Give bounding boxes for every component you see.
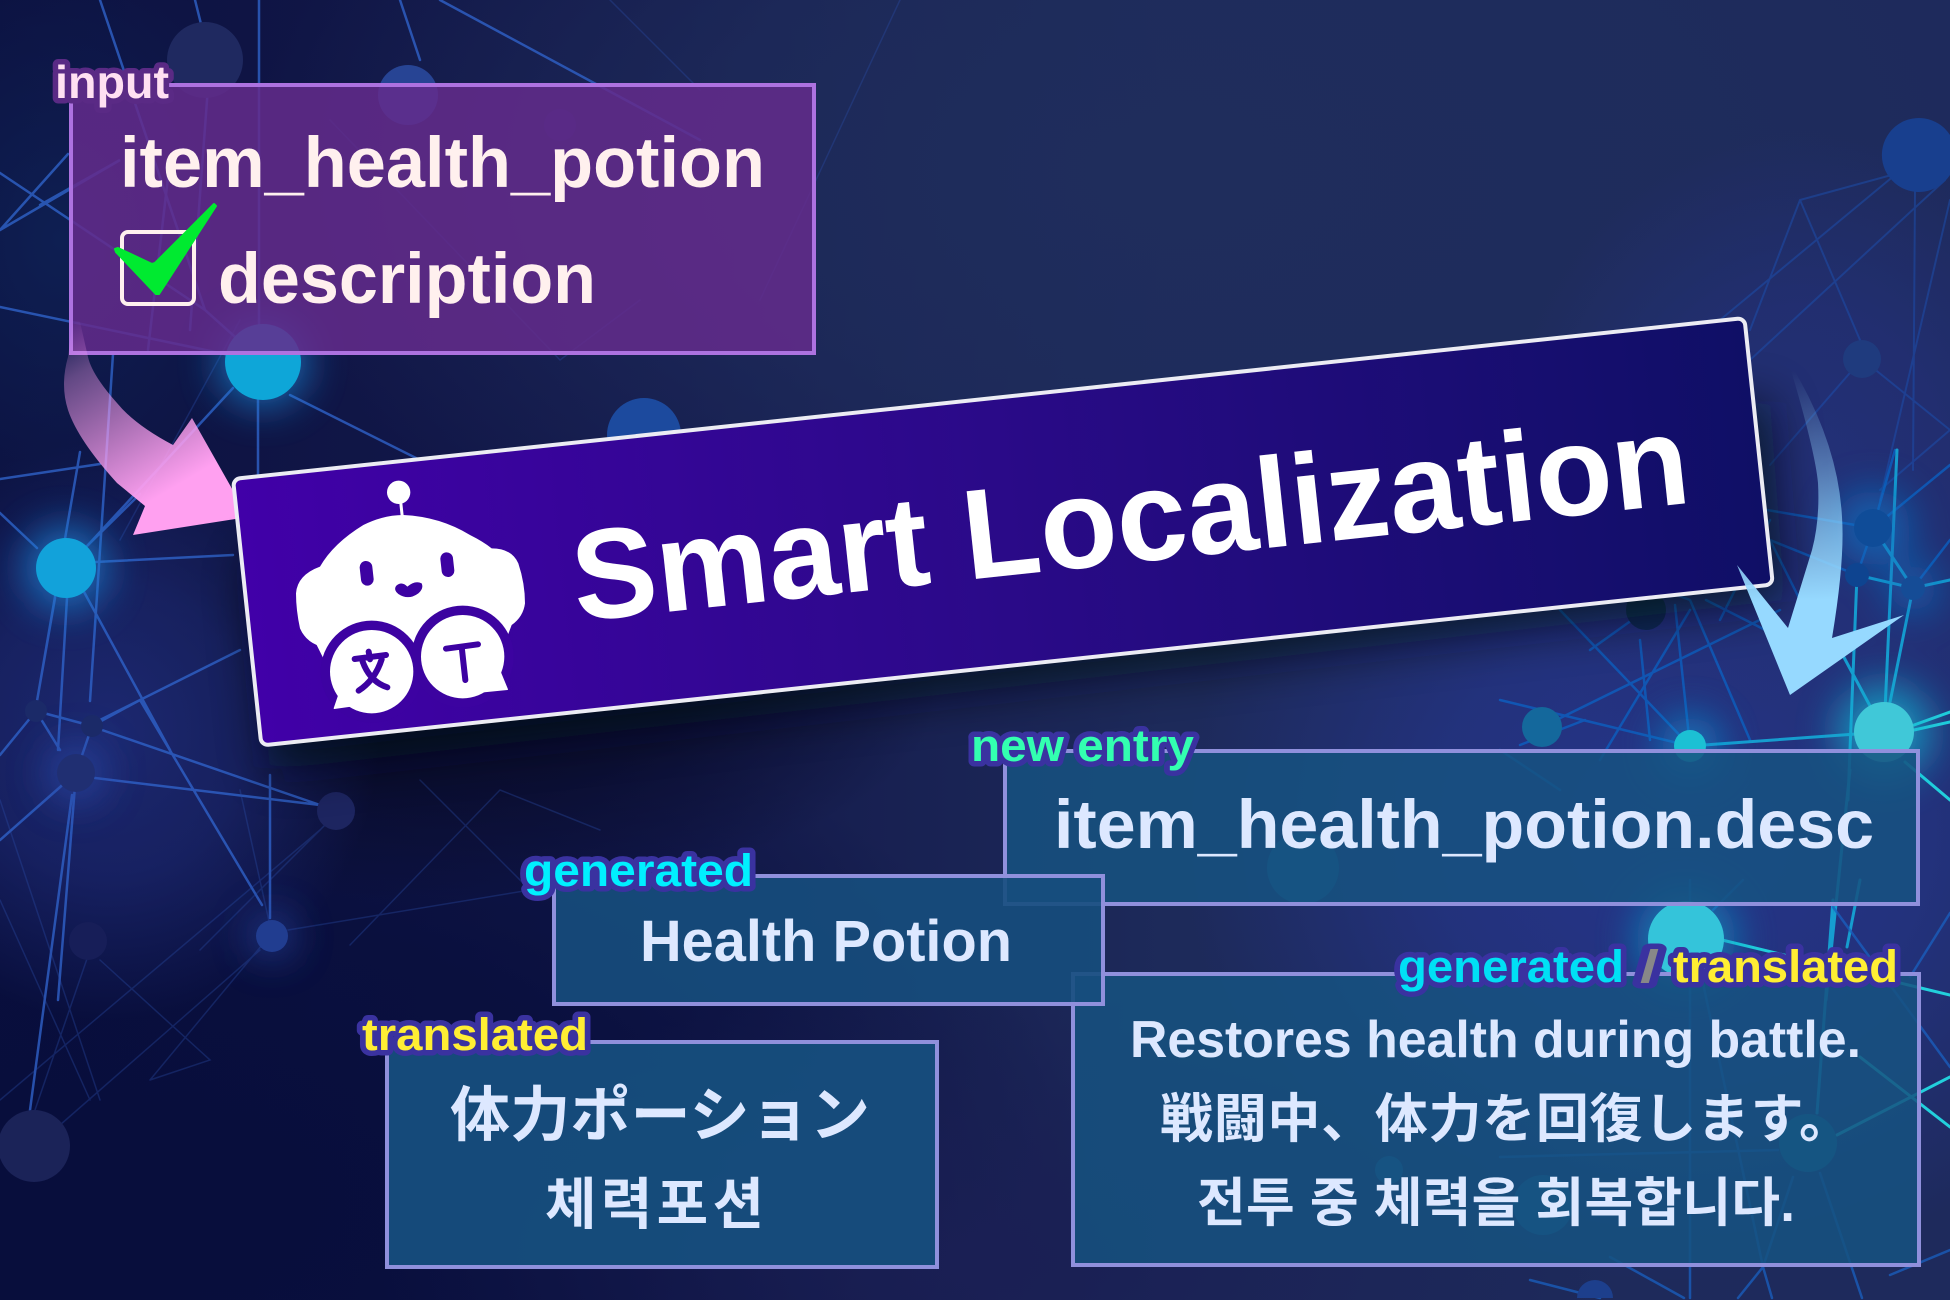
icon: green check mark — [115, 204, 216, 294]
label: translated: translated — [362, 1009, 588, 1060]
japanese description: 戦闘中、体力を回復します。 — [1160, 1090, 1852, 1149]
arrow: pink input arrow — [64, 321, 248, 535]
panel: input — [71, 85, 814, 353]
new entry key text: item_health_potion.desc — [1054, 786, 1874, 863]
icon: robot logo — [296, 481, 525, 723]
translated tag: translated — [1673, 941, 1898, 992]
panel: new entry — [1005, 751, 1918, 904]
banner title: Smart Localization — [565, 388, 1696, 649]
korean description: 전투 중 체력을 회복합니다. — [1197, 1174, 1795, 1233]
panel: translated name — [387, 1042, 937, 1267]
japanese name: 体力ポーション — [450, 1082, 870, 1149]
label: generated: generated — [524, 845, 753, 896]
panel: health potion — [554, 876, 1103, 1004]
input key text: item_health_potion — [120, 124, 765, 203]
korean name: 체력포션 — [545, 1173, 764, 1236]
slash: / — [1640, 941, 1660, 992]
label: generated / translated — [1398, 941, 1898, 992]
label: new entry: new entry — [971, 720, 1194, 771]
generated name: Health Potion — [640, 909, 1012, 974]
banner: Smart Localization — [233, 318, 1773, 745]
label: generated / translated: generated — [1398, 941, 1624, 992]
label: input: input — [55, 56, 169, 108]
panel: generated description — [1073, 974, 1919, 1265]
arrow: blue output arrow — [1737, 360, 1904, 695]
checkbox — [122, 232, 194, 304]
english description: Restores health during battle. — [1130, 1011, 1861, 1069]
input option text: description — [218, 240, 596, 319]
banner shadow — [250, 400, 1785, 770]
